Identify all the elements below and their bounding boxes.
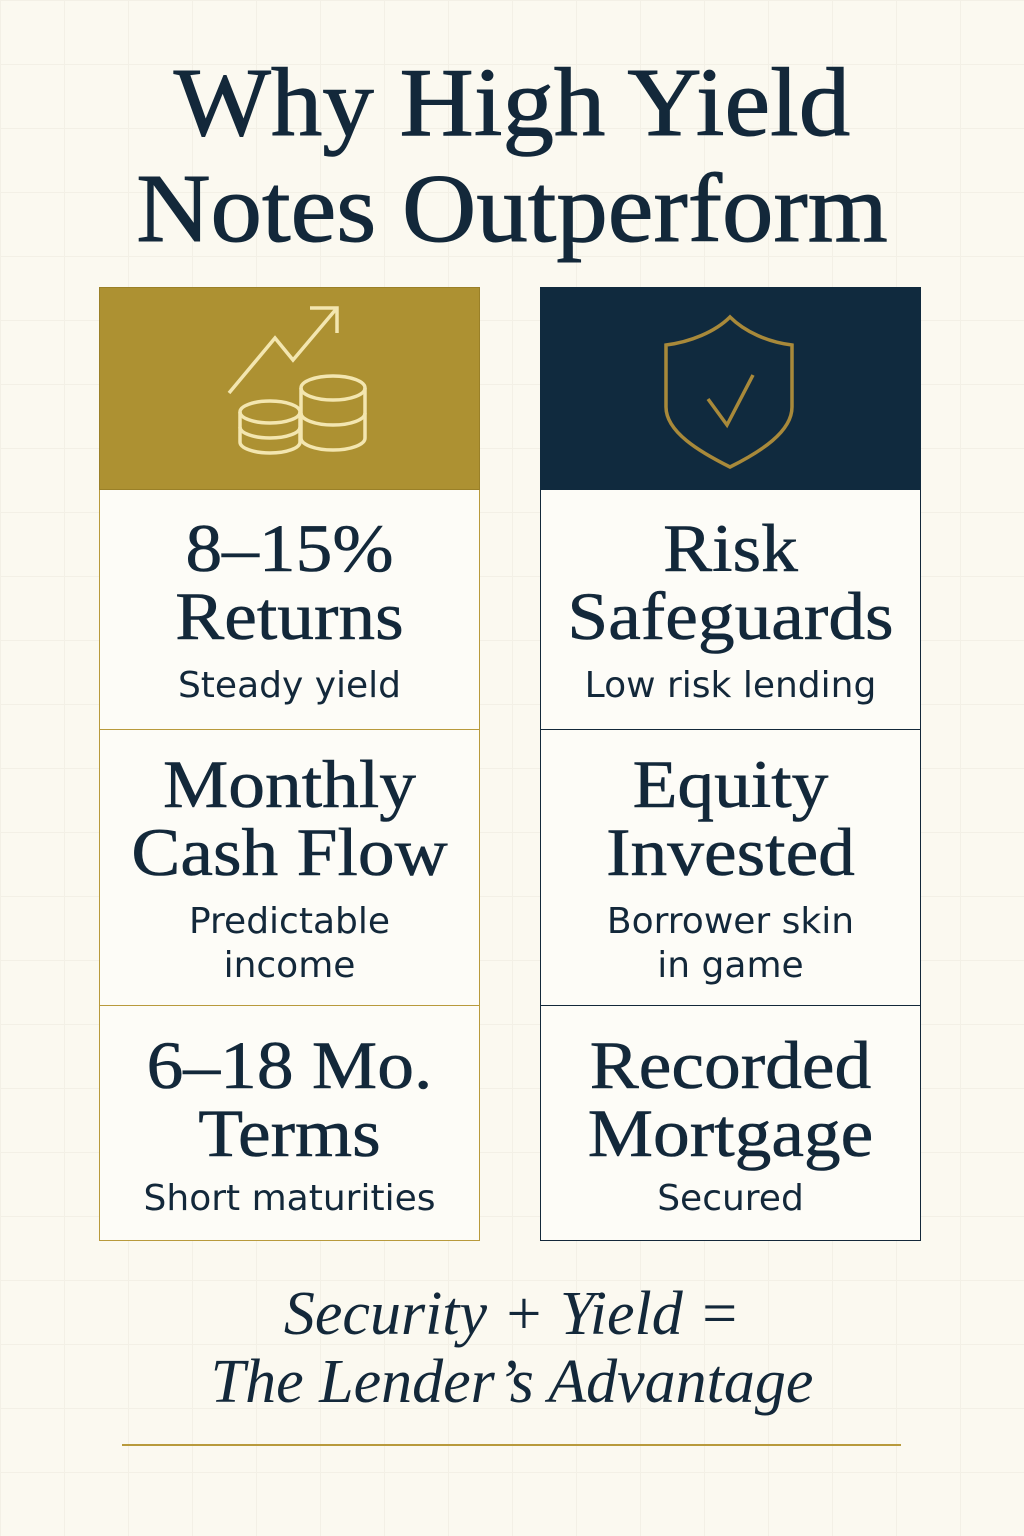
cell: risk [540,490,921,730]
panel: returns [99,287,480,1241]
divider line [122,1444,901,1446]
title: Why High Yield [174,49,850,157]
cell: terms [99,1006,480,1241]
cell: cash flow [99,730,480,1006]
cell: returns: Returns [175,578,404,654]
cell: mortgage: Recorded [590,1027,871,1103]
cell: cash flow: Monthly [163,746,416,822]
cell: returns: 8–15% [185,510,394,586]
title [136,49,888,263]
cell: cash flow: income [224,945,355,986]
panel: safeguards [540,287,921,1241]
cell: mortgage: Secured [657,1178,804,1219]
cell: cash flow: Cash Flow [131,814,448,890]
cell: equity: Equity [633,746,828,822]
cell: returns [99,490,480,730]
cell: equity [540,730,921,1006]
cell: mortgage [540,1006,921,1241]
cell: risk: Risk [663,510,798,586]
cell: terms: Short maturities [144,1178,435,1219]
cell: mortgage: Mortgage [588,1095,873,1171]
icon: coins with rising arrow [99,287,480,490]
cell: returns: Steady yield [178,665,401,706]
footer tagline: The Lender’s Advantage [211,1348,813,1416]
icon: shield check [540,287,921,490]
footer tagline [211,1280,813,1416]
footer tagline: Security + Yield = [284,1280,740,1348]
cell: equity: in game [657,945,804,986]
cell: terms: Terms [198,1095,381,1171]
title: Notes Outperform [136,155,888,263]
cell: risk: Safeguards [567,578,894,654]
cell: risk: Low risk lending [585,665,876,706]
cell: equity: Invested [606,814,855,890]
cell: equity: Borrower skin [607,901,854,942]
cell: terms: 6–18 Mo. [147,1027,432,1103]
cell: cash flow: Predictable [189,901,390,942]
